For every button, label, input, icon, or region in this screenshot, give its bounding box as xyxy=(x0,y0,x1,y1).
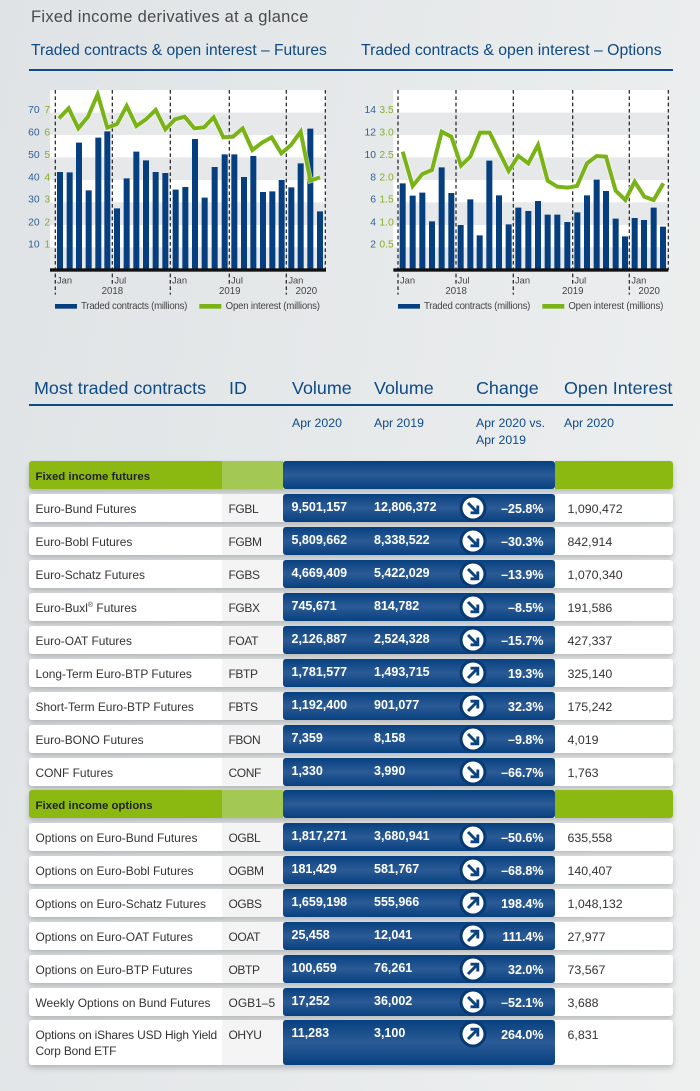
row: Euro-OAT Futures: FOAT xyxy=(228,634,258,648)
section header: fixed income futures xyxy=(29,461,673,489)
row: Euro-Schatz Futures: 1,070,340 xyxy=(568,568,623,582)
row: Euro-Buxl Futures: 191,586 xyxy=(568,601,612,615)
axis labels: 2 xyxy=(44,217,50,228)
table headings: Volume xyxy=(374,378,434,398)
row: Short-Term Euro-BTP Futures: 175,242 xyxy=(568,700,612,714)
row: Options on Euro-Bobl Futures: –68.8% xyxy=(501,864,544,878)
table headings: Apr 2019 xyxy=(476,432,526,446)
table headings: Apr 2020 xyxy=(564,416,614,430)
row: Short-Term Euro-BTP Futures: 32.3% xyxy=(508,700,544,714)
table headings: Apr 2020 xyxy=(292,416,342,430)
row: CONF Futures: CONF xyxy=(228,766,261,780)
legend: Traded contracts (millions) xyxy=(424,301,530,312)
row: Euro-Bobl Futures: 8,338,522 xyxy=(374,533,430,547)
row: Euro-Buxl Futures: 814,782 xyxy=(374,599,419,613)
axis labels: 2 xyxy=(370,240,376,251)
axis labels: 3.0 xyxy=(379,127,394,138)
table headings: Open Interest xyxy=(564,378,672,398)
row: Euro-OAT Futures: 2,126,887 xyxy=(292,632,347,646)
axis labels: 6 xyxy=(44,127,50,138)
row: Euro-Buxl Futures: Euro-Buxl® Futures xyxy=(36,601,137,615)
row: Weekly Options on Bund Futures: 36,002 xyxy=(374,994,412,1008)
section header: fixed income futures: Fixed income futures xyxy=(36,471,150,483)
axis labels: 2019 xyxy=(562,286,583,297)
row: Options on iShares USD High Yield Corp Bond ETF: 11,283 xyxy=(292,1026,329,1040)
row: Euro-Schatz Futures: Euro-Schatz Futures xyxy=(36,568,145,582)
row: Euro-Buxl Futures: –8.5% xyxy=(508,601,544,615)
axis labels: 10 xyxy=(364,150,376,161)
row: Options on iShares USD High Yield Corp Bond ETF: 6,831 xyxy=(568,1028,599,1042)
axis labels xyxy=(28,105,317,297)
row: Options on Euro-BTP Futures: OBTP xyxy=(228,962,260,976)
row: Euro-Bund Futures: FGBL xyxy=(228,502,258,516)
row: Euro-Bobl Futures: –30.3% xyxy=(501,535,544,549)
axis labels: 1 xyxy=(44,240,50,251)
axis labels: 20 xyxy=(28,217,40,228)
row: Weekly Options on Bund Futures xyxy=(29,988,673,1016)
row: Short-Term Euro-BTP Futures: Short-Term Euro-BTP Futures xyxy=(36,700,194,714)
heading: futures chart: Traded contracts & open interest – Futures xyxy=(31,42,327,59)
line: open interest xyxy=(403,132,663,200)
row: Options on Euro-Schatz Futures: 1,659,198 xyxy=(292,895,347,909)
row: Long-Term Euro-BTP Futures: 325,140 xyxy=(568,667,612,681)
row: Euro-Bund Futures xyxy=(29,494,673,522)
row: Euro-Bobl Futures xyxy=(29,527,673,555)
row: Short-Term Euro-BTP Futures: FBTS xyxy=(228,700,258,714)
row: Euro-BONO Futures: 8,158 xyxy=(374,731,405,745)
row: Euro-Schatz Futures: FGBS xyxy=(228,568,260,582)
row: Long-Term Euro-BTP Futures: 1,781,577 xyxy=(292,665,347,679)
row: Euro-BONO Futures: 4,019 xyxy=(568,733,599,747)
row: Euro-BONO Futures: Euro-BONO Futures xyxy=(36,733,144,747)
row: CONF Futures: 3,990 xyxy=(374,764,405,778)
row: Options on Euro-OAT Futures: Options on Euro-OAT Futures xyxy=(36,930,193,944)
table headings: Apr 2019 xyxy=(374,416,424,430)
row: Euro-Bobl Futures: 5,809,662 xyxy=(292,533,347,547)
row: Options on iShares USD High Yield Corp Bond ETF: 3,100 xyxy=(374,1026,405,1040)
legend: Traded contracts (millions) xyxy=(81,301,187,312)
heading: options chart: Traded contracts & open interest – Options xyxy=(361,42,662,59)
row: Options on Euro-Schatz Futures: 555,966 xyxy=(374,895,419,909)
axis labels: 2.5 xyxy=(379,150,394,161)
axis labels: 6 xyxy=(370,195,376,206)
chart: futures xyxy=(28,87,326,312)
row: Options on iShares USD High Yield Corp Bond ETF: OHYU xyxy=(228,1028,262,1042)
row: Short-Term Euro-BTP Futures xyxy=(29,692,673,720)
row: Euro-BONO Futures: –9.8% xyxy=(508,733,544,747)
row: Long-Term Euro-BTP Futures: Long-Term Euro-BTP Futures xyxy=(36,667,192,681)
row: Options on Euro-Bobl Futures: 581,767 xyxy=(374,862,419,876)
row: CONF Futures: 1,330 xyxy=(292,764,323,778)
row: Short-Term Euro-BTP Futures: 1,192,400 xyxy=(292,698,347,712)
page title: Fixed income derivatives at a glance xyxy=(31,8,309,26)
axis labels xyxy=(364,105,660,297)
axis labels: 60 xyxy=(28,127,40,138)
axis labels: 10 xyxy=(28,240,40,251)
row: Options on Euro-OAT Futures: 25,458 xyxy=(292,928,330,942)
row: Euro-Buxl Futures xyxy=(29,593,673,621)
row: Options on Euro-BTP Futures xyxy=(29,954,673,982)
axis labels: 14 xyxy=(364,105,376,116)
axis labels: 7 xyxy=(44,105,50,116)
axis labels: Jul xyxy=(458,275,470,285)
table headings: Most traded contracts xyxy=(34,378,206,398)
axis labels: 8 xyxy=(370,172,376,183)
axis labels: 50 xyxy=(28,150,40,161)
row: Options on Euro-OAT Futures: 27,977 xyxy=(568,930,605,944)
axis labels: 40 xyxy=(28,172,40,183)
bars: traded contracts xyxy=(60,129,320,270)
row: Options on Euro-Bund Futures: 635,558 xyxy=(568,831,612,845)
row: Weekly Options on Bund Futures: 3,688 xyxy=(568,996,599,1010)
axis labels: Jan xyxy=(57,275,72,285)
row: Options on Euro-Bund Futures: 1,817,271 xyxy=(292,829,347,843)
row: Options on Euro-Schatz Futures: 198.4% xyxy=(501,897,544,911)
row: Euro-Bund Futures: –25.8% xyxy=(501,502,544,516)
axis labels: Jan xyxy=(288,275,303,285)
row: Options on Euro-OAT Futures xyxy=(29,922,673,950)
row: Euro-Bund Futures: 12,806,372 xyxy=(374,500,437,514)
axis labels: 2020 xyxy=(296,286,317,297)
row: Options on Euro-Schatz Futures xyxy=(29,889,673,917)
row: Options on iShares USD High Yield Corp Bond ETF: Options on iShares USD High Yield xyxy=(36,1028,217,1042)
axis labels: 4 xyxy=(370,217,376,228)
row: Options on Euro-Bobl Futures: OGBM xyxy=(228,864,264,878)
axis labels: 1.5 xyxy=(379,195,394,206)
axis labels: Jul xyxy=(574,275,586,285)
axis labels: 5 xyxy=(44,150,50,161)
row: Euro-Schatz Futures xyxy=(29,560,673,588)
row: Options on Euro-Bobl Futures: Options on Euro-Bobl Futures xyxy=(36,864,193,878)
table headings: ID xyxy=(229,378,247,398)
row: Options on Euro-Bund Futures: –50.6% xyxy=(501,831,544,845)
row: Long-Term Euro-BTP Futures xyxy=(29,659,673,687)
axis labels: 30 xyxy=(28,195,40,206)
row: Weekly Options on Bund Futures: –52.1% xyxy=(501,996,544,1010)
row: Euro-BONO Futures: FBON xyxy=(228,733,260,747)
axis labels: 4 xyxy=(44,172,50,183)
row: Options on Euro-Bund Futures: OGBL xyxy=(228,831,260,845)
table headings: Apr 2020 vs. xyxy=(476,416,545,430)
axis labels: Jul xyxy=(231,275,243,285)
legend: Open interest (millions) xyxy=(568,301,663,312)
row: Euro-Buxl Futures: FGBX xyxy=(228,601,260,615)
axis labels: 2018 xyxy=(445,286,467,297)
row: Options on Euro-Bobl Futures: 181,429 xyxy=(292,862,337,876)
row: CONF Futures: CONF Futures xyxy=(36,766,113,780)
row: Euro-OAT Futures: –15.7% xyxy=(501,634,544,648)
row: Long-Term Euro-BTP Futures: FBTP xyxy=(228,667,258,681)
row: Weekly Options on Bund Futures: 17,252 xyxy=(292,994,330,1008)
row: Euro-OAT Futures: Euro-OAT Futures xyxy=(36,634,132,648)
row: Options on iShares USD High Yield Corp Bond ETF: Corp Bond ETF xyxy=(36,1044,116,1058)
row: Euro-Schatz Futures: 4,669,409 xyxy=(292,566,347,580)
row: Options on Euro-Bund Futures: Options on Euro-Bund Futures xyxy=(36,831,197,845)
row: Options on iShares USD High Yield Corp Bond ETF xyxy=(29,1020,673,1065)
row: Options on Euro-Schatz Futures: OGBS xyxy=(228,897,262,911)
row: Euro-Schatz Futures: 5,422,029 xyxy=(374,566,430,580)
row: Euro-OAT Futures xyxy=(29,626,673,654)
axis labels: 1.0 xyxy=(379,217,394,228)
row: Weekly Options on Bund Futures: OGB1–5 xyxy=(228,996,275,1010)
axis labels: 0.5 xyxy=(379,240,394,251)
chart: options xyxy=(364,90,669,312)
section header: fixed income options: Fixed income options xyxy=(36,800,153,812)
axis labels: 12 xyxy=(364,127,376,138)
row: Euro-Bobl Futures: 842,914 xyxy=(568,535,612,549)
axis labels: 2019 xyxy=(219,286,240,297)
row: Options on Euro-BTP Futures: Options on Euro-BTP Futures xyxy=(36,962,193,976)
row: Options on Euro-Schatz Futures: Options on Euro-Schatz Futures xyxy=(36,897,206,911)
row: Euro-Bund Futures: 1,090,472 xyxy=(568,502,623,516)
row: Euro-BONO Futures xyxy=(29,725,673,753)
row: Euro-OAT Futures: 2,524,328 xyxy=(374,632,430,646)
row: Euro-Bobl Futures: FGBM xyxy=(228,535,262,549)
row: Options on Euro-OAT Futures: OOAT xyxy=(228,930,260,944)
row: Options on Euro-Bund Futures: 3,680,941 xyxy=(374,829,430,843)
axis labels: Jan xyxy=(631,275,646,285)
axis labels: Jul xyxy=(114,275,126,285)
row: Options on Euro-Schatz Futures: 1,048,132 xyxy=(568,897,623,911)
row: Options on Euro-OAT Futures: 111.4% xyxy=(502,930,544,944)
axis labels: 2020 xyxy=(638,286,660,297)
table headings: Change xyxy=(476,378,539,398)
row: Euro-Schatz Futures: –13.9% xyxy=(501,568,544,582)
row: Short-Term Euro-BTP Futures: 901,077 xyxy=(374,698,419,712)
axis labels: Jan xyxy=(515,275,530,285)
row: Euro-Bobl Futures: Euro-Bobl Futures xyxy=(36,535,132,549)
bars: traded contracts xyxy=(403,161,663,270)
row: Euro-OAT Futures: 427,337 xyxy=(568,634,612,648)
row: Options on Euro-BTP Futures: 76,261 xyxy=(374,960,412,974)
row: Euro-Bund Futures: Euro-Bund Futures xyxy=(36,502,136,516)
line: open interest xyxy=(59,94,320,181)
legend xyxy=(55,301,320,312)
row: Options on Euro-BTP Futures: 73,567 xyxy=(568,962,605,976)
legend: Open interest (millions) xyxy=(226,301,320,312)
row: Options on iShares USD High Yield Corp Bond ETF: 264.0% xyxy=(501,1028,544,1042)
axis labels: 2018 xyxy=(102,286,123,297)
row: CONF Futures xyxy=(29,758,673,786)
axis labels: Jan xyxy=(400,275,415,285)
row: Options on Euro-BTP Futures: 32.0% xyxy=(508,962,544,976)
row: Long-Term Euro-BTP Futures: 19.3% xyxy=(508,667,544,681)
row: CONF Futures: 1,763 xyxy=(568,766,599,780)
axis labels: Jan xyxy=(172,275,187,285)
axis labels: 70 xyxy=(28,105,40,116)
row: Options on Euro-Bund Futures xyxy=(29,823,673,851)
row: Euro-Buxl Futures: 745,671 xyxy=(292,599,337,613)
row: CONF Futures: –66.7% xyxy=(501,766,544,780)
row: Options on Euro-OAT Futures: 12,041 xyxy=(374,928,412,942)
row: Euro-Bund Futures: 9,501,157 xyxy=(292,500,347,514)
row: Weekly Options on Bund Futures: Weekly Options on Bund Futures xyxy=(36,996,210,1010)
row: Options on Euro-Bobl Futures: 140,407 xyxy=(568,864,612,878)
axis labels: 3.5 xyxy=(379,105,394,116)
legend xyxy=(398,301,663,312)
axis labels: 3 xyxy=(44,195,50,206)
row: Options on Euro-BTP Futures: 100,659 xyxy=(292,960,337,974)
axis labels: 2.0 xyxy=(379,172,394,183)
table headings: Volume xyxy=(292,378,352,398)
table headings xyxy=(29,378,673,446)
row: Euro-BONO Futures: 7,359 xyxy=(292,731,323,745)
section header: fixed income options xyxy=(29,790,673,818)
row: Long-Term Euro-BTP Futures: 1,493,715 xyxy=(374,665,430,679)
row: Options on Euro-Bobl Futures xyxy=(29,856,673,884)
